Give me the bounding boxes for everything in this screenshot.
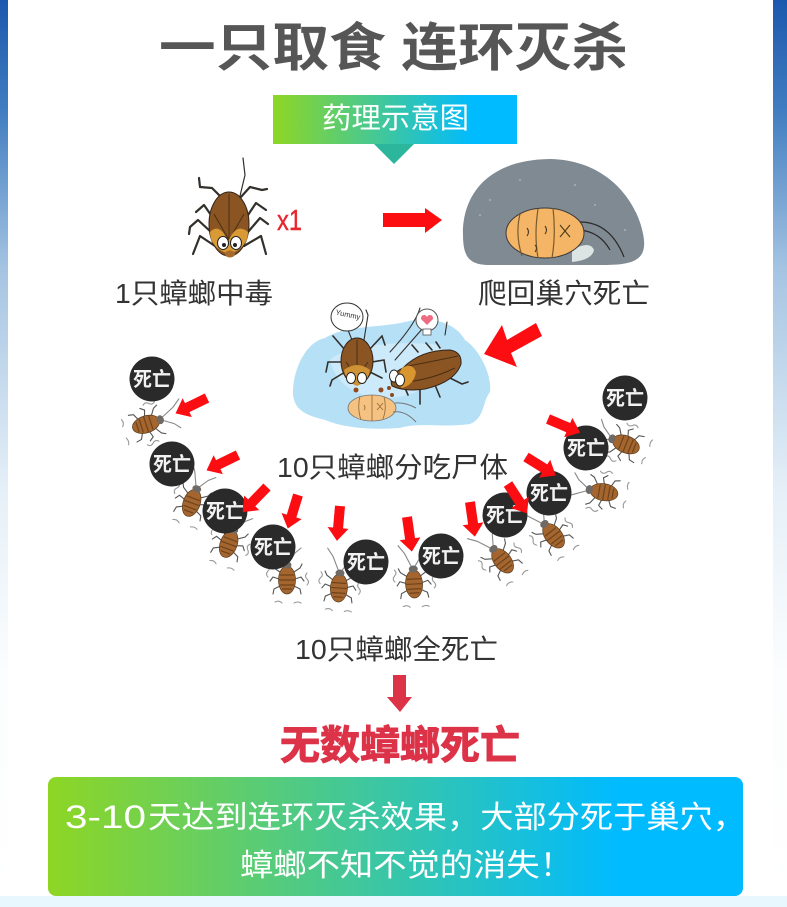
label: 1只蟑螂中毒: 1只蟑螂中毒 xyxy=(115,278,273,309)
death badge 2: 死亡 xyxy=(153,453,191,476)
label: 爬回巢穴死亡: 爬回巢穴死亡 xyxy=(478,278,650,309)
death badge 5 xyxy=(344,540,388,584)
dead cockroach 6 xyxy=(392,544,437,608)
red arrow 1 xyxy=(171,389,212,423)
dead cockroach 8 xyxy=(513,492,585,567)
banner: 药理示意图 xyxy=(273,95,517,164)
icon: cave with dead cockroach xyxy=(463,159,644,265)
death badge 1: 死亡 xyxy=(133,368,171,391)
banner: 药理示意图: 药理示意图 xyxy=(322,102,469,135)
death badge 8: 死亡 xyxy=(530,482,568,505)
dead cockroach 5 xyxy=(317,548,363,612)
red arrow 6 xyxy=(397,516,422,553)
speech bubble: Yummy: Yummy xyxy=(335,308,361,322)
red arrow 4 xyxy=(278,492,308,532)
cockroach B xyxy=(390,350,461,390)
dead cockroach 2 xyxy=(165,459,225,532)
death badge 9 xyxy=(564,426,608,470)
dead cockroach 9 xyxy=(562,464,630,516)
bottom band xyxy=(0,896,787,907)
arrow: to nest xyxy=(383,208,442,233)
death badge 10 xyxy=(602,376,648,420)
red arrow 9 xyxy=(520,448,561,484)
death badge 8 xyxy=(526,470,572,516)
red arrow 10 xyxy=(544,409,584,442)
speech bubble: Yummy xyxy=(331,303,363,331)
death badge 3 xyxy=(202,488,248,534)
death badge 3: 死亡 xyxy=(206,500,244,523)
death badge 1 xyxy=(130,356,174,402)
red arrow 7 xyxy=(460,501,485,538)
speech bubble: heart xyxy=(416,309,438,335)
illustration: cockroaches eating corpse xyxy=(293,303,490,429)
callout panel: 天达到连环灭杀效果，大部分死于巢穴， xyxy=(148,800,746,835)
death badge 10: 死亡 xyxy=(606,387,644,410)
red arrow 5 xyxy=(326,505,350,542)
label: 10只蟑螂分吃尸体: 10只蟑螂分吃尸体 xyxy=(277,452,508,483)
dead cockroach 3 xyxy=(202,500,262,573)
death badge 2 xyxy=(150,442,194,486)
callout panel xyxy=(48,777,746,896)
dead cockroach 10 xyxy=(582,410,655,472)
right side strip xyxy=(773,0,787,896)
corpse xyxy=(348,386,416,422)
death badge 9: 死亡 xyxy=(567,437,605,460)
death badge 7: 死亡 xyxy=(486,504,524,527)
red arrow 8 xyxy=(499,478,536,519)
death badge 6 xyxy=(418,534,464,578)
arrow: nest to group xyxy=(484,323,542,367)
arrow: down xyxy=(387,675,412,712)
red arrow 2 xyxy=(202,446,243,480)
heading: 无数蟑螂死亡: 无数蟑螂死亡 xyxy=(280,724,520,768)
title: 一只取食 连环灭杀 xyxy=(159,20,628,78)
callout panel: 蟑螂不知不觉的消失！ xyxy=(240,848,573,883)
label: 10只蟑螂全死亡: 10只蟑螂全死亡 xyxy=(295,634,498,665)
death badge 6: 死亡 xyxy=(422,545,460,568)
red arrow 3 xyxy=(235,480,275,519)
death badge 4 xyxy=(250,524,296,570)
dead cockroach 7 xyxy=(462,517,534,592)
dead cockroach 4 xyxy=(266,541,308,603)
death badge 4: 死亡 xyxy=(254,536,292,559)
icon: poisoned cockroach xyxy=(189,158,268,258)
death badge 5: 死亡 xyxy=(347,551,385,574)
x1 label: x1 xyxy=(277,205,302,237)
callout panel: 3-10 xyxy=(65,799,146,835)
cockroach A xyxy=(341,338,373,386)
dead cockroach 1 xyxy=(118,393,190,452)
death badge 7 xyxy=(482,492,528,538)
left side strip xyxy=(0,0,8,896)
